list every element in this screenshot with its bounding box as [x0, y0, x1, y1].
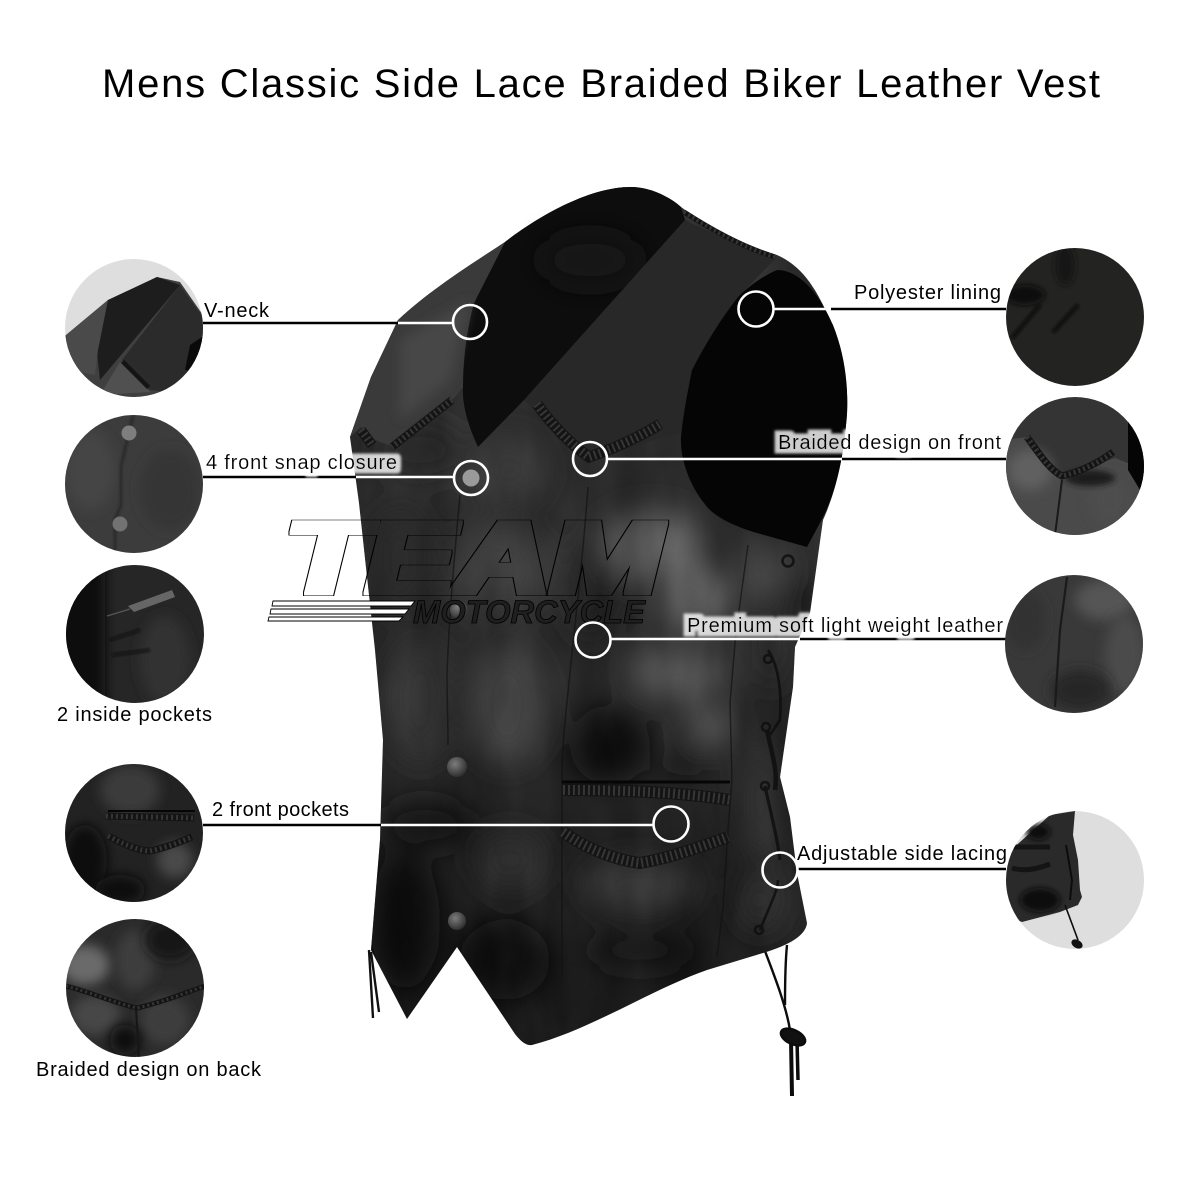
detail circle: front snaps — [65, 415, 203, 553]
detail circle: front braid — [1006, 397, 1144, 535]
right lapel — [524, 220, 777, 458]
vest body — [350, 187, 847, 1045]
callout: Polyester lining — [738, 282, 1006, 326]
inner neck lining — [463, 187, 685, 447]
detail circle: side lacing — [1006, 811, 1144, 949]
lapel braids — [361, 400, 660, 457]
callout: Premium soft light weight leather — [576, 615, 1006, 658]
front snaps — [447, 470, 480, 930]
detail circle: front pockets — [65, 764, 203, 902]
callout: V-neck: V-neck — [204, 300, 270, 322]
label: Braided design on back: Braided design on back — [36, 1059, 262, 1081]
neck braid trim — [684, 212, 775, 257]
callout: 2 front pockets: 2 front pockets — [212, 799, 349, 821]
leather shading — [340, 180, 860, 1050]
side lacing — [755, 556, 794, 934]
label: 2 inside pockets: 2 inside pockets — [57, 704, 212, 726]
callout: Braided design on front: Braided design on front — [778, 432, 1001, 454]
callout: V-neck — [203, 300, 487, 339]
detail circle: V-neck — [65, 259, 203, 397]
pocket braids — [562, 782, 730, 863]
title: Mens Classic Side Lace Braided Biker Leather Vest — [102, 62, 1100, 106]
detail circle: leather — [1005, 575, 1143, 713]
lace fringe left — [369, 950, 379, 1018]
callout: Adjustable side lacing — [762, 843, 1007, 888]
detail circle: polyester lining — [1006, 248, 1144, 386]
watermark logo: TEAM MOTORCYCLE — [268, 500, 664, 630]
speed stripes — [268, 601, 415, 621]
callout: 2 front pockets — [203, 799, 688, 842]
callout: 4 front snap closure — [203, 452, 488, 495]
callout: 4 front snap closure: 4 front snap closure — [206, 452, 397, 474]
callout: Braided design on front — [573, 432, 1006, 476]
callout: Polyester lining: Polyester lining — [854, 282, 1001, 304]
leather vest photo illustration — [340, 180, 860, 1096]
left lapel sheen — [400, 300, 470, 420]
callout: Premium soft light weight leather: Premium soft light weight leather — [687, 615, 1003, 637]
watermark word TEAM: TEAM — [285, 500, 664, 617]
callout: Adjustable side lacing: Adjustable side lacing — [797, 843, 1007, 865]
armhole — [681, 270, 847, 547]
detail circle: inside pockets — [66, 565, 204, 703]
seams — [447, 487, 748, 975]
left lapel — [350, 242, 505, 447]
watermark word MOTORCYCLE: MOTORCYCLE — [413, 594, 647, 630]
lace cords and knot right — [757, 930, 808, 1096]
detail circle: back braid — [66, 919, 204, 1057]
